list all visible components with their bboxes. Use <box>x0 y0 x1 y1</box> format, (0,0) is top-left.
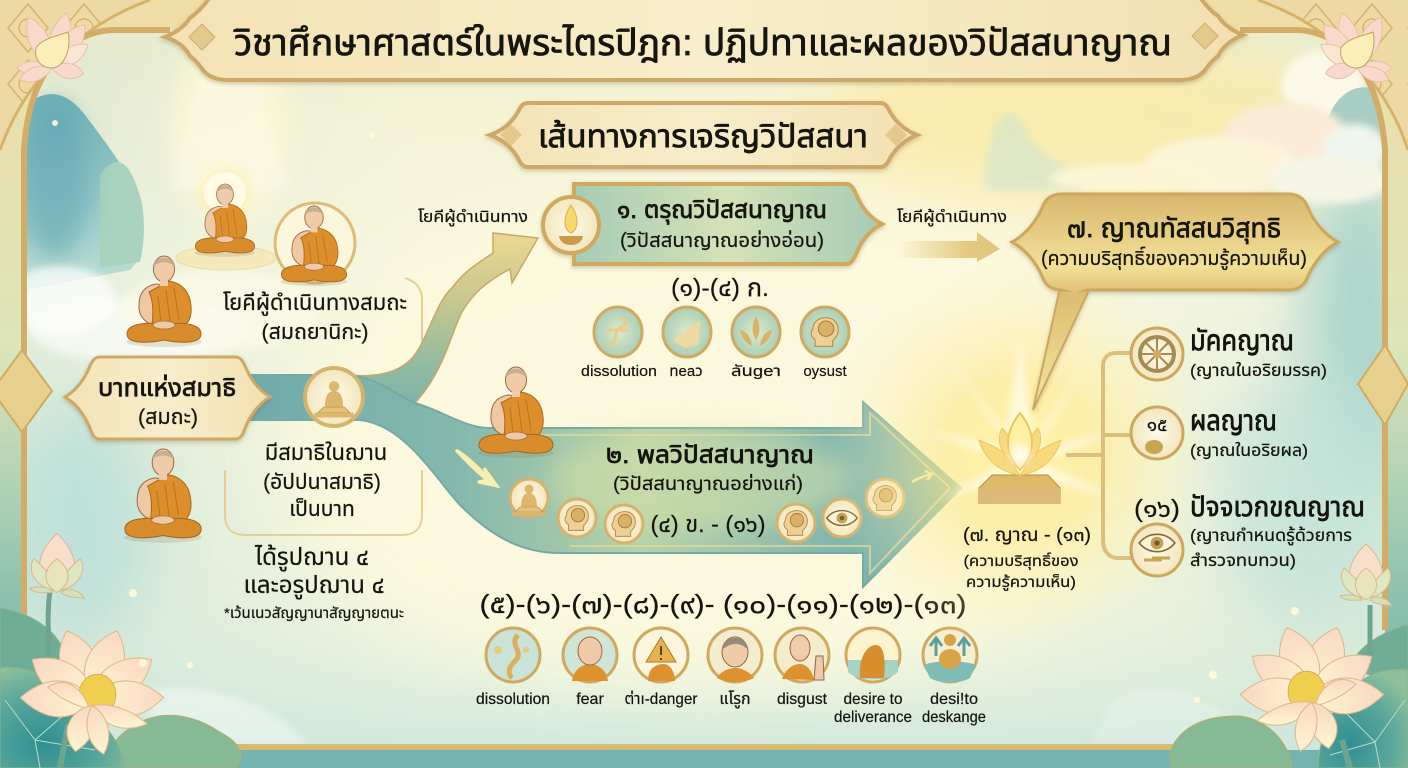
icon: fruit <box>1131 407 1183 459</box>
icon labels row one <box>581 363 848 380</box>
stage seven caption <box>963 525 1091 591</box>
big arrow stage two <box>250 375 961 587</box>
review knowledge text: (๑๖) <box>1134 495 1180 523</box>
icon labels row two: ต่าı-danger <box>624 690 698 708</box>
icon: fruit: ๑๕ <box>1147 415 1167 436</box>
big arrow inner light <box>540 413 950 573</box>
small flow arrow right <box>912 471 932 482</box>
monk on big arrow <box>478 367 554 458</box>
monk left upper <box>126 256 202 347</box>
rupa jhana text: และอรูปฌาน ๔ <box>243 572 385 600</box>
frame ornament right <box>1358 345 1408 425</box>
stage two text: (๔) ข. - (๑๖) <box>650 511 766 537</box>
section heading banner <box>490 103 917 167</box>
icon: dissolution <box>594 307 642 357</box>
icon labels row one: dissolution <box>581 363 657 380</box>
arrow up to stage one <box>250 233 538 420</box>
lotus pond left <box>0 534 241 768</box>
callout panel: purity: ๗. ญาณทัสสนวิสุทธิ <box>1067 213 1281 244</box>
icon labels row two: dissolution <box>476 691 550 708</box>
icon: monk face <box>708 628 762 682</box>
mountains left <box>20 94 144 290</box>
icon labels row two: disgust <box>777 691 828 708</box>
icon: dharma wheel <box>1131 328 1183 380</box>
connector tree <box>1066 353 1133 558</box>
clouds left <box>5 266 320 362</box>
path knowledge text <box>1190 325 1327 380</box>
jhana text: (อัปปนาสมาธิ) <box>263 471 381 494</box>
icon: disgust <box>775 628 829 682</box>
panel: basis of samadhi <box>65 357 270 439</box>
icon labels row two: deskange <box>922 709 986 726</box>
stages sequence: (๕)-(๖)-(๗)-(๘)-(๙)- (๑๐)-(๑๑)-(๑๒)-(๑๓) <box>480 589 966 619</box>
arrow to purity <box>898 232 1000 262</box>
central light burst <box>825 260 1215 650</box>
icon labels row two: แโรูก <box>719 691 751 708</box>
small flow arrow <box>456 450 497 486</box>
monk with halo on platform <box>176 159 276 270</box>
fruit knowledge text: ผลญาณ <box>1190 405 1277 437</box>
icon: glowing lotus on pedestal <box>979 413 1061 503</box>
frame ornament left <box>0 350 52 432</box>
review knowledge text: ปัจจเวกขณญาณ <box>1190 491 1365 522</box>
panel: stage one: ๑. ตรุณวิปัสสนาญาณ <box>617 196 827 225</box>
jhana text <box>263 440 387 521</box>
icon: fear <box>563 628 617 682</box>
icon row one <box>594 307 849 357</box>
light rays <box>170 35 290 225</box>
rupa jhana text: ได้รูปฌาน ๔ <box>254 544 369 572</box>
samatha yogi text: โยคีผู้ดำเนินทางสมถะ <box>223 290 407 316</box>
title text: วิชาศึกษาศาสตร์ในพระไตรปิฎก: ปฏิปทาและผลของวิปัสสนาญาณ <box>233 22 1172 63</box>
samatha yogi text: (สมถยานิกะ) <box>262 321 368 344</box>
stage seven caption: (ความบริสุทธิ์ของ <box>964 552 1078 570</box>
icon labels row two <box>476 690 986 726</box>
path knowledge text: (ญาณในอริยมรรค) <box>1190 361 1327 380</box>
fruit knowledge text <box>1190 405 1308 460</box>
stage two text: (วิปัสสนาญาณอย่างแก่) <box>613 472 803 495</box>
stage two text <box>606 441 814 537</box>
rupa jhana text <box>224 544 404 622</box>
section heading text: เส้นทางการเจริญวิปัสสนา <box>538 118 868 154</box>
icon labels row one: ลันgeา <box>731 363 781 380</box>
icon labels row one: oysust <box>803 363 848 380</box>
fruit knowledge text: (ญาณในอริยผล) <box>1190 441 1308 460</box>
monk in circle <box>275 203 355 286</box>
icon: leaves <box>732 307 780 357</box>
stage one range: (๑)-(๔) ก. <box>671 274 769 302</box>
review knowledge text <box>1134 491 1365 570</box>
text panel outlines <box>225 278 422 535</box>
icon labels row two: fear <box>576 691 604 708</box>
icon row two <box>486 628 977 682</box>
panel: basis of samadhi: บาทแห่งสมาธิ <box>98 374 236 402</box>
panel: stage one <box>543 184 882 264</box>
monk left lower <box>124 449 202 543</box>
pale waves bottom <box>150 687 1260 745</box>
icon: buddha in circle <box>305 368 363 426</box>
icon: deliverance <box>846 628 900 682</box>
stage seven caption: ความรู้ความเห็น) <box>966 573 1076 591</box>
icon labels row two: deliverance <box>834 709 912 726</box>
callout panel: purity <box>1012 194 1338 410</box>
icon: lamp <box>543 197 599 253</box>
path knowledge text: มัคคญาณ <box>1190 325 1294 357</box>
icon: danger <box>634 628 688 682</box>
stage two icons <box>510 479 904 543</box>
lotus pond right <box>1170 544 1408 768</box>
mountains and clouds right <box>985 51 1390 204</box>
corner lotus left <box>17 10 93 86</box>
review knowledge text: สำรวจทบทวน) <box>1190 551 1296 570</box>
title ornament right <box>1192 23 1218 49</box>
panel: stage one: (วิปัสสนาญาณอย่างอ่อน) <box>620 229 824 252</box>
samatha yogi text <box>223 290 407 344</box>
icon: eye review <box>1131 524 1183 576</box>
rupa jhana text: *เว้นเนวสัญญานาสัญญายตนะ <box>224 605 404 622</box>
icon: brain head <box>801 307 849 357</box>
icon: dissolution 2 <box>486 628 540 682</box>
icon: deskange <box>923 628 977 682</box>
jhana text: มีสมาธิในฌาน <box>265 440 387 465</box>
callout panel: purity: (ความบริสุทธิ์ของความรู้ความเห็น) <box>1041 246 1307 271</box>
panel: basis of samadhi: (สมถะ) <box>138 406 198 429</box>
title banner <box>165 0 1243 80</box>
icon labels row two: desire to <box>844 691 903 708</box>
label: yogi left: โยคีผู้ดำเนินทาง <box>418 209 528 226</box>
icon: hands <box>663 307 711 357</box>
stage seven caption: (๗. ญาณ - (๑๓) <box>963 525 1091 546</box>
icon labels row one: ทeaว <box>669 363 703 380</box>
stage two text: ๒. พลวิปัสสนาญาณ <box>606 441 814 469</box>
corner lotus right <box>1316 10 1392 86</box>
jhana text: เป็นบาท <box>289 498 355 521</box>
sparkles <box>52 82 1299 703</box>
title ornament left <box>189 24 215 50</box>
label: yogi right: โยคีผู้ดำเนินทาง <box>897 209 1007 226</box>
icon labels row two: desi!to <box>930 691 978 708</box>
review knowledge text: (ญาณกำหนดรู้ด้วยการ <box>1190 525 1352 547</box>
stage two icon glyphs <box>512 484 896 536</box>
